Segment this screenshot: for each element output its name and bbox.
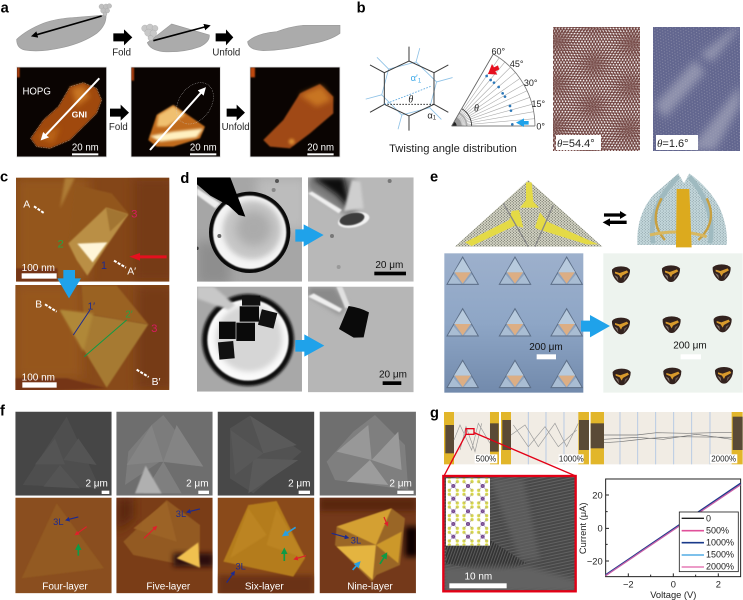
fan chart of twisting angle distribution: 45° — [510, 59, 524, 69]
AFM top image: 100 nm — [22, 263, 55, 274]
hexagon twist diagram: α′ — [411, 73, 418, 83]
TEM image with crystal inset: 10 nm — [464, 571, 492, 582]
moire image theta 54.4: θ=54.4° — [557, 138, 595, 150]
moire image theta 1.6 — [653, 27, 740, 151]
chart legend: 1500% — [706, 550, 734, 560]
panel label g: g — [430, 405, 439, 421]
panel label c: c — [0, 170, 8, 186]
AFM bottom image: 3 — [151, 323, 157, 335]
moire image theta 54.4 — [553, 27, 640, 151]
reversible arrows — [603, 211, 627, 226]
panel b: twisting angle — [357, 1, 546, 155]
blue arrow bottom — [295, 334, 324, 357]
blue arrow — [581, 315, 610, 337]
AFM top image — [16, 178, 173, 282]
hexagon twist diagram: α — [427, 110, 433, 120]
AFM bottom image: B — [35, 300, 42, 311]
red zoom callout — [444, 429, 576, 476]
SEM nine-layer: 2 μm — [389, 479, 412, 490]
SEM four-layer — [15, 412, 112, 496]
hexagon twist diagram — [360, 38, 458, 139]
microscopy: droplet with tip — [197, 177, 302, 282]
AFM four-layer: Four-layer — [42, 581, 88, 592]
AFM five-layer: Five-layer — [146, 581, 191, 592]
crystal structure inset — [446, 478, 490, 546]
AFM image 3: unfolded GNI: 20 nm — [307, 143, 334, 154]
AFM top image: A — [23, 199, 30, 210]
arrow: fold (top): Fold — [112, 47, 131, 58]
fan chart of twisting angle distribution: 30° — [524, 78, 538, 88]
hexagon twist diagram: 1 — [433, 116, 437, 122]
caption: twisting angle distribution: Twisting angle distribution — [389, 143, 517, 155]
AFM bottom image: 100 nm — [22, 372, 55, 383]
panel a: graphene nanoisland folding — [1, 0, 340, 157]
panel c: AFM folding of flake — [0, 170, 173, 392]
flat triangle pattern — [455, 180, 602, 247]
SEM six-layer — [218, 412, 314, 496]
AFM image 1: GNI on HOPG: 20 nm — [72, 143, 99, 154]
microscopy: collapsed droplet: 20 μm — [375, 260, 403, 271]
hexagon twist diagram: θ — [408, 95, 413, 106]
arrow: fold (bottom) — [109, 105, 129, 133]
moire image theta 1.6: θ=1.6° — [657, 138, 689, 150]
IV chart: 0 — [671, 580, 676, 590]
IV chart: −20 — [587, 556, 603, 566]
blue down arrow — [57, 270, 81, 298]
panel label b: b — [357, 1, 366, 17]
panel label d: d — [180, 171, 189, 187]
SEM four-layer: 2 μm — [85, 479, 108, 490]
SEM five-layer: 2 μm — [186, 479, 209, 490]
fan chart of twisting angle distribution: 0° — [536, 121, 545, 131]
SEM five-layer — [116, 412, 213, 496]
arrow: fold (bottom): Fold — [109, 122, 128, 133]
AFM image 1: GNI on HOPG: HOPG — [22, 86, 51, 97]
chart legend: 0 — [706, 513, 711, 523]
photo 1000 percent: 1000% — [559, 454, 584, 463]
microscopy: folded array — [603, 253, 743, 393]
AFM bottom image — [15, 285, 173, 392]
IV chart: 0 — [597, 524, 603, 534]
microscopy: flat triangles array: 200 μm — [529, 342, 563, 353]
arrow: unfold (bottom): Unfold — [222, 122, 250, 133]
panel label a: a — [1, 0, 10, 16]
3D flake unfolded — [248, 25, 340, 51]
IV chart: 20 — [592, 490, 603, 500]
microscopy: flat triangles array — [444, 253, 583, 393]
photo 500 percent: 500% — [476, 454, 496, 463]
AFM bottom image: B′ — [152, 377, 160, 388]
IV chart — [578, 479, 741, 600]
AFM bottom image: 1′ — [88, 301, 95, 312]
panel label f: f — [0, 404, 5, 420]
AFM image 1: GNI on HOPG: GNI — [72, 109, 87, 119]
chart legend: 1000% — [706, 538, 734, 548]
AFM nine-layer: Nine-layer — [347, 581, 393, 592]
photo 2000 percent: 2000% — [711, 454, 736, 463]
AFM top image: 1 — [101, 260, 107, 272]
panel f: multilayer flakes — [0, 404, 418, 595]
arrow: unfold (top) — [212, 29, 240, 58]
microscopy: droplet with cubes — [197, 286, 302, 392]
AFM four-layer — [15, 498, 112, 593]
chart legend — [679, 512, 738, 572]
panel e: origami hydrogel structures — [430, 170, 743, 393]
panel d: capillary folding microscopy — [180, 171, 414, 392]
photo 500 percent — [444, 412, 499, 464]
AFM image 1: GNI on HOPG — [16, 67, 107, 157]
AFM nine-layer: 3L — [351, 536, 361, 546]
IV chart: Voltage (V) — [650, 590, 696, 600]
arrow: fold (top) — [112, 29, 132, 58]
IV chart: −2 — [623, 580, 634, 590]
AFM image 2: folded GNI: 20 nm — [190, 143, 217, 154]
red arrow marker — [488, 64, 499, 75]
microscopy: folded array: 200 μm — [673, 340, 707, 351]
fan chart of twisting angle distribution: 15° — [532, 99, 546, 109]
AFM image 2: folded GNI — [131, 67, 221, 157]
AFM five-layer — [116, 498, 213, 593]
AFM five-layer: 3L — [176, 509, 186, 519]
SEM six-layer: 2 μm — [288, 479, 311, 490]
panel g: stretchable device — [430, 405, 743, 600]
AFM top image: 3 — [131, 209, 137, 221]
AFM bottom image: 2′ — [125, 309, 133, 320]
dome folded structure — [637, 173, 727, 247]
IV chart: Current (μA) — [578, 503, 588, 554]
arrow: unfold (bottom) — [222, 105, 250, 133]
hexagon twist diagram: 1 — [418, 78, 422, 84]
chart legend: 2000% — [706, 562, 734, 572]
AFM nine-layer — [320, 498, 418, 593]
microscopy: folded cube — [308, 287, 414, 392]
red arrow — [129, 253, 167, 261]
SEM nine-layer — [320, 412, 416, 496]
AFM four-layer: 3L — [53, 517, 64, 527]
photo 1000 percent — [501, 412, 589, 464]
blue arrow marker — [516, 118, 529, 127]
microscopy: folded cube: 20 μm — [379, 370, 407, 381]
photo 2000 percent — [591, 412, 743, 464]
blue arrow top — [295, 224, 324, 247]
AFM six-layer: Six-layer — [245, 581, 284, 592]
3D flake with tip, before folding — [17, 4, 112, 51]
AFM top image: 2 — [58, 239, 64, 251]
IV chart: 2 — [716, 580, 721, 590]
microscopy: collapsed droplet — [308, 177, 414, 282]
TEM image with crystal inset — [443, 476, 577, 592]
chart legend: 500% — [706, 525, 729, 535]
fan chart of twisting angle distribution: 60° — [492, 46, 506, 56]
fan chart of twisting angle distribution: θ — [474, 104, 479, 115]
panel label e: e — [430, 170, 438, 186]
arrow: unfold (top): Unfold — [212, 47, 240, 58]
fan chart of twisting angle distribution — [452, 46, 546, 131]
AFM image 3: unfolded GNI — [250, 67, 340, 157]
AFM six-layer: 3L — [235, 562, 246, 572]
AFM six-layer — [218, 498, 314, 595]
3D flake folded with tip — [142, 24, 209, 52]
AFM top image: A′ — [127, 266, 136, 277]
